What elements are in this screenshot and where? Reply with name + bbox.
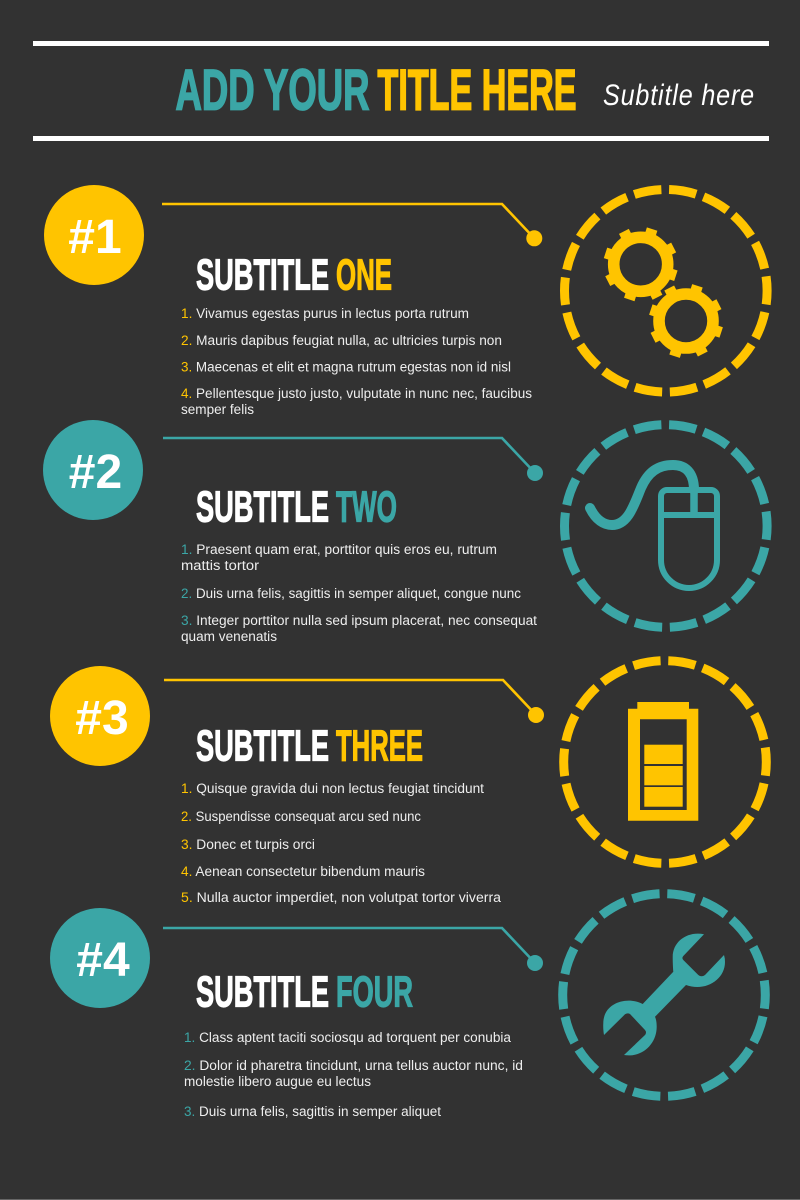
list: section 1: 2. Mauris dapibus feugiat nulla, ac ultricies turpis non: [181, 333, 502, 348]
battery casing: [628, 702, 698, 821]
number badge #4: [50, 908, 150, 1008]
list: section 1: semper felis: [181, 402, 254, 417]
gear 1: [604, 227, 678, 301]
icon: mouse in dashed ring: [564, 425, 767, 627]
number badge #2: #2: [69, 446, 122, 499]
mouse body: [661, 490, 717, 588]
icon: gears in dashed ring: [564, 189, 767, 392]
list: section 2: [181, 542, 537, 644]
list: section 4: 2. Dolor id pharetra tincidunt, urna tellus auctor nunc, id: [184, 1058, 523, 1073]
heading: subtitle three: SUBTITLE: [196, 722, 329, 770]
list: section 2: 2. Duis urna felis, sagittis in semper aliquet, congue nunc: [181, 586, 521, 601]
battery cells: [644, 745, 683, 807]
header: title band: [33, 41, 769, 141]
icon: wrench in dashed ring: [563, 894, 765, 1096]
section 3: [50, 661, 766, 905]
mouse button divider: [690, 490, 698, 515]
connector line 4: [163, 928, 543, 971]
number badge #2: [43, 420, 143, 520]
section 4: [50, 894, 765, 1119]
list: section 3: 5. Nulla auctor imperdiet, non volutpat tortor viverra: [181, 890, 502, 905]
heading: subtitle one: ONE: [336, 250, 392, 300]
subtitle: Subtitle here: [603, 79, 755, 112]
list: section 4: [184, 1030, 523, 1119]
heading: subtitle four: FOUR: [336, 968, 413, 1016]
list: section 4: molestie libero augue eu lectus: [184, 1074, 371, 1089]
wrench: [603, 934, 725, 1055]
list: section 2: 3. Integer porttitor nulla sed ipsum placerat, nec consequat: [181, 613, 537, 628]
list: section 1: [181, 306, 532, 417]
list: section 3: 2. Suspendisse consequat arcu sed nunc: [181, 809, 421, 824]
title: TITLE HERE: [378, 58, 576, 122]
list: section 2: 1. Praesent quam erat, porttitor quis eros eu, rutrum: [181, 542, 497, 557]
heading: subtitle one: SUBTITLE: [196, 250, 329, 300]
list: section 3: [181, 781, 502, 905]
connector line 1: [162, 204, 542, 246]
list: section 3: 1. Quisque gravida dui non lectus feugiat tincidunt: [181, 781, 484, 796]
heading: subtitle three: THREE: [336, 722, 423, 770]
icon: battery in dashed ring: [564, 661, 766, 863]
number badge #3: [50, 666, 150, 766]
list: section 2: mattis tortor: [181, 558, 260, 573]
connector line 3: [164, 680, 544, 723]
list: section 2: quam venenatis: [181, 629, 277, 644]
heading: subtitle two: SUBTITLE: [196, 482, 329, 532]
list: section 3: 4. Aenean consectetur bibendum mauris: [181, 864, 425, 879]
list: section 4: 1. Class aptent taciti sociosqu ad torquent per conubia: [184, 1030, 511, 1045]
heading: subtitle four: SUBTITLE: [196, 968, 329, 1016]
list: section 1: 3. Maecenas et elit et magna rutrum egestas non id nisl: [181, 360, 511, 374]
number badge #4: #4: [76, 934, 130, 987]
number badge #3: #3: [75, 692, 129, 745]
mouse cable: [590, 465, 694, 525]
list: section 3: 3. Donec et turpis orci: [181, 837, 315, 852]
list: section 1: 4. Pellentesque justo justo, vulputate in nunc nec, faucibus: [181, 386, 532, 401]
list: section 1: 1. Vivamus egestas purus in lectus porta rutrum: [181, 306, 469, 321]
heading: subtitle two: TWO: [336, 482, 397, 532]
connector line 2: [163, 438, 543, 481]
list: section 4: 3. Duis urna felis, sagittis in semper aliquet: [184, 1104, 441, 1119]
number badge #1: #1: [68, 211, 122, 264]
section 1: [44, 185, 767, 417]
gear 2: [649, 284, 723, 358]
number badge #1: [44, 185, 144, 285]
title: ADD YOUR: [176, 58, 370, 122]
section 2: [43, 420, 767, 644]
